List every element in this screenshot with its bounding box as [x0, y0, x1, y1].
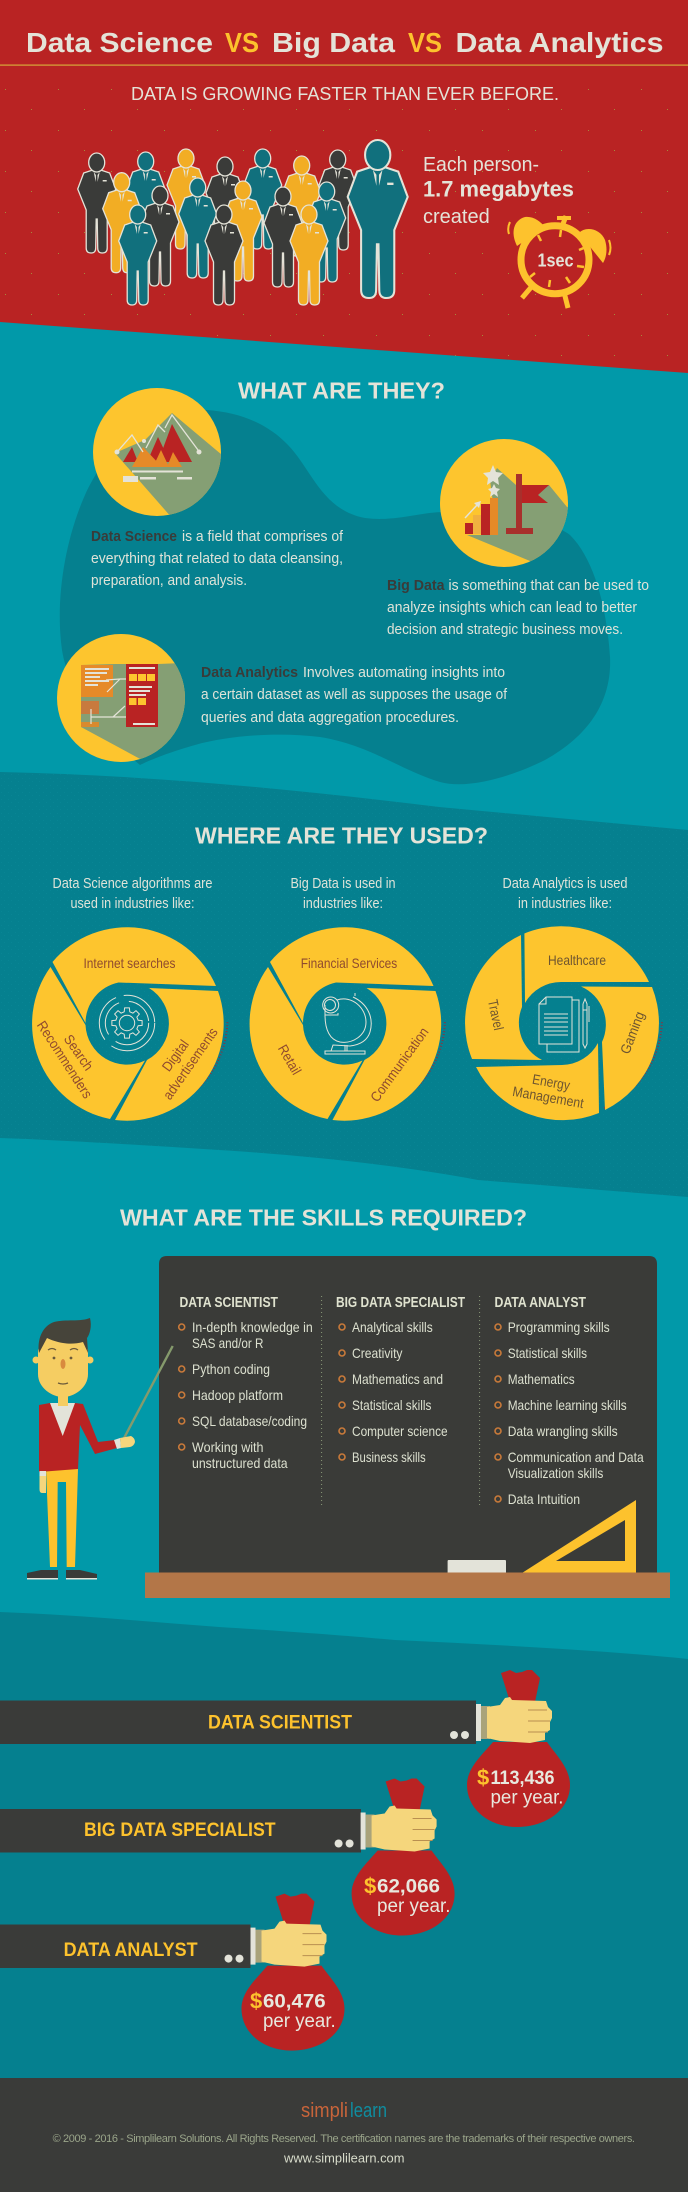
column: big data specialist: Statistical skills [352, 1397, 431, 1413]
labels: data analytics industries [485, 952, 647, 1111]
text: each person [423, 154, 574, 228]
hair [39, 1318, 91, 1353]
heading: WHERE ARE THEY USED? [195, 822, 488, 848]
labels: data science industries: Digital [158, 1037, 192, 1074]
column: data analyst: DATA ANALYST [494, 1295, 586, 1311]
trousers [46, 1469, 78, 1567]
labels: big data industries [275, 955, 432, 1105]
labels: data science industries: Recommenders [34, 1018, 96, 1101]
labels: big data industries: Retail [275, 1042, 305, 1077]
labels: data analytics industries: Healthcare [548, 952, 606, 968]
salary: big data specialist: BIG DATA SPECIALIST [84, 1819, 276, 1841]
panel: skills required [27, 1204, 670, 1598]
text: data science: is a field that comprises of [182, 528, 344, 545]
text: data analytics: Data Analytics [201, 664, 298, 681]
column: data scientist: SQL database/coding [192, 1413, 307, 1429]
column: data scientist: SAS and/or R [192, 1335, 264, 1351]
labels: data analytics industries: Energy [531, 1071, 571, 1093]
salary: data analyst: $ [250, 1988, 262, 2014]
chart: data science ring [32, 927, 228, 1121]
neck [58, 1392, 68, 1406]
icon: alarm clock [508, 216, 610, 308]
title: Data Analytics [456, 27, 664, 58]
pointer [123, 1346, 173, 1440]
column: big data specialist [336, 1295, 465, 1465]
heading: WHAT ARE THE SKILLS REQUIRED? [120, 1204, 527, 1230]
text: column intros: used in industries like: [70, 896, 194, 912]
text: data analytics: a certain dataset as well as supposes the usage of [201, 686, 508, 703]
labels: data analytics industries: Management [511, 1083, 585, 1111]
salary: big data specialist [0, 1778, 455, 1936]
text: each person: 1.7 megabytes [423, 176, 574, 202]
column: data scientist: In-depth knowledge in [192, 1319, 313, 1335]
panel: salaries [0, 1670, 570, 2051]
column: data scientist: Working with [192, 1439, 264, 1455]
text: each person: Each person- [423, 154, 539, 176]
salary: data analyst [0, 1894, 344, 2051]
text: big data: analyze insights which can lead to better [387, 599, 637, 616]
background blob [60, 410, 610, 784]
icon: eraser [448, 1560, 506, 1574]
salary: data scientist: DATA SCIENTIST [208, 1712, 352, 1734]
panel: header red section [0, 0, 688, 373]
sweater [39, 1403, 117, 1472]
column: data analyst: Mathematics [508, 1371, 575, 1387]
labels: data analytics industries: Gaming [617, 1009, 647, 1056]
icon: data analytics documents [57, 634, 195, 762]
column: data analyst: Visualization skills [508, 1465, 603, 1481]
panel: what are they [57, 378, 649, 784]
text: big data: decision and strategic business moves. [387, 621, 623, 638]
text: data science: Data Science [91, 528, 177, 545]
column: data scientist: DATA SCIENTIST [180, 1295, 278, 1311]
text: column intros [52, 876, 628, 912]
shoes [27, 1570, 97, 1579]
text: data analytics: queries and data aggregation procedures. [201, 709, 459, 726]
text: data analytics [201, 664, 508, 726]
column: big data specialist: Analytical skills [352, 1319, 433, 1335]
salary: data analyst: 60,476 [263, 1990, 326, 2012]
icon: data science mountains [93, 388, 221, 516]
column: data analyst: Communication and Data [508, 1449, 644, 1465]
text: each person: created [423, 206, 490, 228]
right hand [114, 1438, 121, 1449]
column: data analyst: Machine learning skills [508, 1397, 627, 1413]
text: big data: Big Data [387, 577, 445, 594]
icon: alarm clock: 1sec [538, 251, 574, 271]
labels: data science industries: Search [61, 1031, 97, 1073]
labels: data science industries: Internet searches [84, 955, 176, 971]
website: www.simplilearn.com [283, 2150, 404, 2166]
column: data scientist: Python coding [192, 1361, 270, 1377]
column: big data specialist: Mathematics and [352, 1371, 443, 1387]
icon: documents and pen [539, 997, 589, 1052]
column: big data specialist: BIG DATA SPECIALIST [336, 1295, 465, 1311]
panel: where are they used [32, 822, 662, 1121]
icon: gear [99, 995, 155, 1051]
logo: simpli [301, 2100, 348, 2122]
title: VS [225, 27, 259, 58]
panel: footer [0, 2078, 688, 2192]
icon: globe [323, 993, 371, 1054]
text: big data: is something that can be used to [448, 577, 649, 594]
salary: data scientist: per year. [490, 1788, 564, 1808]
column: big data specialist: Creativity [352, 1345, 402, 1361]
text: data science: everything that related to data cleansing, [91, 550, 343, 567]
icon: crowd of people [78, 140, 408, 305]
text: big data [387, 577, 649, 638]
icon: teacher [27, 1318, 173, 1580]
column: big data specialist: Business skills [352, 1449, 426, 1465]
chart: data analytics ring [465, 926, 662, 1120]
labels: data analytics industries: Travel [485, 998, 507, 1032]
salary: data scientist: 113,436 [490, 1767, 555, 1789]
text: column intros: Data Analytics is used [502, 876, 628, 892]
salary: data analyst: per year. [263, 2011, 336, 2032]
text: data science [91, 528, 344, 589]
subtitle: DATA IS GROWING FASTER THAN EVER BEFORE. [131, 83, 559, 104]
logo: learn [350, 2100, 387, 2122]
column: data analyst: Data Intuition [508, 1491, 580, 1507]
heading: WHAT ARE THEY? [238, 378, 445, 404]
labels: big data industries: Communication [367, 1024, 432, 1105]
copyright: © 2009 - 2016 - Simplilearn Solutions. All Rights Reserved. The certification names are the trademarks of their respective owners. [53, 2133, 635, 2145]
column: data scientist: unstructured data [192, 1455, 288, 1471]
labels: data science industries: advertisements [160, 1024, 221, 1102]
column: data scientist: Hadoop platform [192, 1387, 283, 1403]
blackboard [159, 1256, 657, 1575]
salary: big data specialist: per year. [377, 1896, 450, 1917]
column: big data specialist: Computer science [352, 1423, 448, 1439]
text: column intros: Big Data is used in [290, 876, 396, 892]
column: data scientist [179, 1295, 313, 1471]
text: column intros: in industries like: [518, 896, 612, 912]
text: data analytics: Involves automating insights into [303, 664, 505, 681]
icon: set square [522, 1500, 636, 1573]
salary: big data specialist: $ [364, 1874, 376, 1898]
shelf [145, 1572, 670, 1598]
column: data analyst: Data wrangling skills [508, 1423, 618, 1439]
title: VS [408, 27, 442, 58]
salary: data analyst: DATA ANALYST [64, 1939, 198, 1961]
column: data analyst: Programming skills [508, 1319, 610, 1335]
title: Data Science [26, 27, 213, 58]
column: data analyst: Statistical skills [508, 1345, 587, 1361]
icon: big data bars and flag [440, 439, 580, 567]
salary: big data specialist: 62,066 [377, 1876, 440, 1898]
panel: salary band background [0, 1612, 688, 2078]
column: data analyst [494, 1295, 644, 1507]
labels: big data industries: Financial Services [301, 955, 397, 971]
text: column intros: industries like: [303, 896, 383, 912]
chart: big data ring [250, 927, 445, 1121]
title [26, 27, 664, 58]
title: Big Data [272, 27, 395, 58]
text: data science: preparation, and analysis. [91, 572, 247, 589]
panel: where band background [0, 772, 688, 1197]
text: column intros: Data Science algorithms are [52, 876, 212, 892]
labels: data science industries [34, 955, 221, 1102]
face [38, 1334, 88, 1397]
salary: data scientist [0, 1670, 570, 1827]
salary: data scientist: $ [477, 1765, 489, 1790]
logo [301, 2100, 387, 2122]
left hand [40, 1472, 46, 1493]
